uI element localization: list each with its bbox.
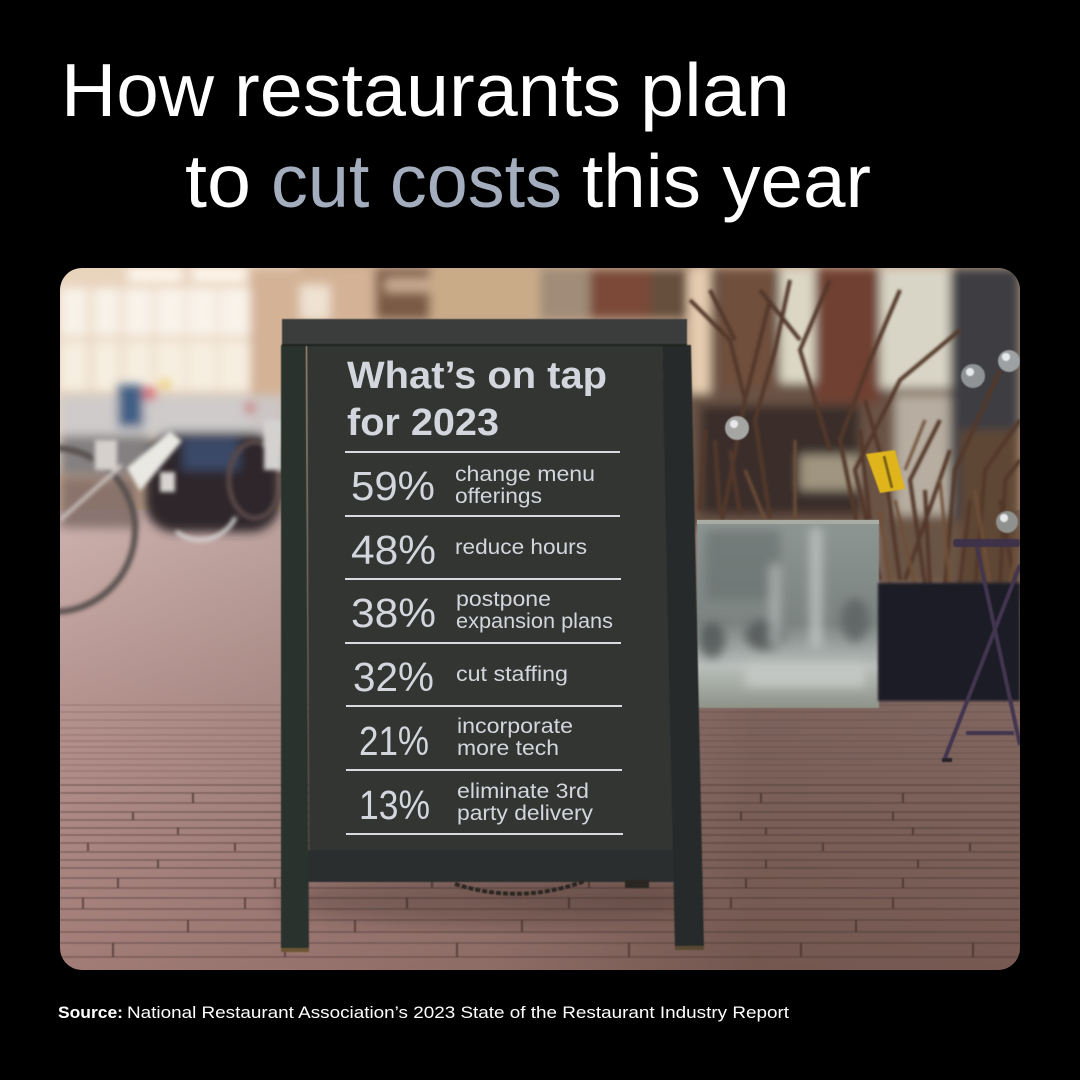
board table: reduce hours: [455, 536, 587, 559]
board table: eliminate 3rd: [457, 780, 589, 803]
title: How: [61, 48, 215, 132]
sandwich board frame: [281, 319, 704, 952]
board table: 48%: [351, 527, 436, 573]
photo: street scene with sandwich board: [0, 250, 1040, 970]
board heading: for 2023: [347, 402, 499, 444]
title: to: [185, 139, 251, 223]
board table: 59%: [351, 463, 435, 509]
icon: yellow licence plate: [866, 450, 905, 493]
title: plan: [640, 48, 790, 132]
concrete planter: [697, 520, 879, 708]
string light bulbs: [725, 350, 1020, 533]
board table: 32%: [353, 654, 434, 700]
board table: change menu: [455, 463, 595, 486]
board shadow on ground: [308, 882, 674, 930]
brick courses: [60, 705, 1020, 957]
board table: expansion plans: [456, 610, 613, 633]
purple bistro table: [942, 539, 1020, 760]
board table: 21%: [359, 718, 429, 764]
parked bicycles: [60, 374, 282, 618]
board heading: [347, 360, 606, 436]
blurred building background: [60, 268, 1020, 510]
board table: postpone: [456, 588, 551, 611]
source note: National Restaurant Association’s 2023 State of the Restaurant Industry Report: [127, 1003, 789, 1022]
board table: cut staffing: [456, 663, 568, 686]
board table: [345, 452, 623, 834]
board table: 38%: [351, 590, 436, 636]
board table: incorporate: [457, 715, 573, 738]
title: restaurants: [234, 48, 621, 132]
black pot: [878, 583, 1020, 701]
board heading: What’s on tap: [347, 355, 607, 397]
title: this year: [582, 139, 871, 223]
board table: 13%: [359, 782, 430, 828]
board table: more tech: [457, 737, 559, 760]
board table: offerings: [455, 485, 542, 508]
ground: [60, 510, 1020, 970]
title: [61, 48, 871, 223]
title: cut costs: [271, 139, 562, 223]
shrub, motorbike and wall: [685, 268, 1020, 598]
source note: Source:: [58, 1003, 123, 1022]
ground darkening toward the right: [183, 510, 1020, 970]
board table: party delivery: [457, 802, 594, 825]
